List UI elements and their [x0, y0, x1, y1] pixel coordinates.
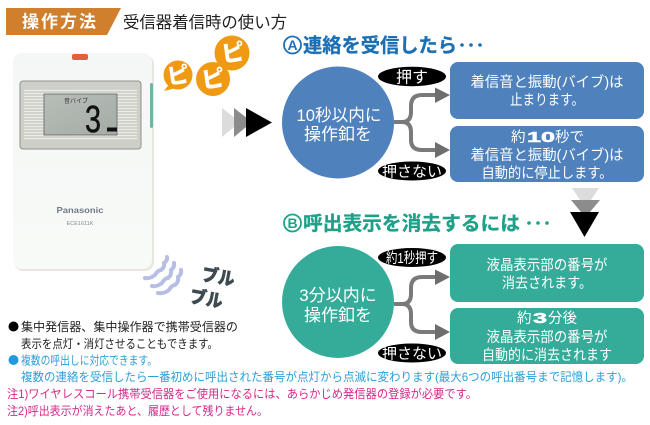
- pill: press 1 sec: [378, 248, 446, 267]
- box B2: 約: [517, 310, 532, 327]
- box A2: [450, 126, 644, 182]
- box A1: 着信音と振動(バイブ)は: [470, 73, 624, 91]
- arrow: down: [570, 188, 600, 237]
- box B2: 液晶表示部の番号が: [486, 329, 608, 346]
- icon: vibration waves: [145, 257, 181, 293]
- icon: pi pi pi: ピ: [165, 62, 191, 89]
- vibration text: [188, 263, 236, 312]
- display stripes: [24, 89, 137, 140]
- vibration text: ブル: [200, 263, 236, 290]
- LCD screen: [44, 94, 117, 135]
- box A2: 10: [527, 129, 555, 146]
- note: multiple calls: 複数の呼出しに対応できます。: [21, 352, 157, 368]
- LCD digit: 3: [85, 99, 101, 141]
- box A1: 止まります。: [510, 92, 584, 109]
- heading A: A: [287, 37, 298, 53]
- pill: no push: 押さない: [382, 164, 442, 180]
- box A2: 自動的に停止します。: [482, 165, 612, 182]
- circle A text: 操作釦を: [304, 125, 372, 144]
- notes: 表示を点灯・消灯させることもできます。: [21, 337, 218, 351]
- circle A text: [296, 106, 382, 144]
- device: pager: [13, 53, 154, 271]
- heading B: 呼出表示を消去するには: [303, 212, 520, 235]
- brand: Panasonic: [56, 205, 104, 215]
- box A2: 約: [511, 129, 526, 146]
- LCD dash: [107, 128, 117, 132]
- branch arrows A: [394, 88, 450, 158]
- box B2: [450, 308, 644, 364]
- panel: B flow: [282, 244, 644, 364]
- panel: A flow: [282, 62, 644, 182]
- heading A: 連絡を受信したら: [303, 34, 457, 57]
- model: ECE1611K: [67, 221, 94, 227]
- arrow: right: [222, 108, 272, 137]
- box B2: 3: [533, 310, 547, 327]
- vibration text: ブル: [188, 285, 224, 312]
- circle B text: 操作釦を: [304, 306, 372, 325]
- header tag: 操作方法: [22, 12, 96, 32]
- circle A: [282, 66, 394, 178]
- notes: 複数の連絡を受信したら一番初めに呼出された番号が点灯から点滅に変わります(最大6つの呼出番号まで記憶します)。: [21, 369, 633, 384]
- header tag: [6, 8, 121, 35]
- circle A text: 10秒以内に: [296, 106, 382, 125]
- branch arrows B: [394, 270, 450, 340]
- box A2: 秒で: [555, 129, 584, 146]
- box B2: 自動的に消去されます: [482, 347, 612, 364]
- icon: pi pi pi: ピ: [200, 65, 226, 93]
- icon: pi pi pi: ピ: [220, 38, 246, 67]
- box B1: [450, 244, 644, 302]
- note: central transmitter: 集中発信器、集中操作器で携帯受信器の: [21, 319, 238, 334]
- red LED: [72, 54, 88, 60]
- box B2: 分後: [548, 310, 577, 327]
- subtitle: 受信器着信時の使い方: [123, 13, 287, 32]
- pill: push: [378, 67, 446, 86]
- icon: pi pi pi: [164, 36, 250, 96]
- heading B: B: [287, 215, 298, 231]
- notes: [7, 319, 633, 418]
- circle B text: 3分以内に: [299, 286, 377, 305]
- box B1: 液晶表示部の番号が: [486, 257, 608, 274]
- pill: press 1 sec: 約1秒押す: [386, 250, 438, 267]
- note 2: 注2)呼出表示が消えたあと、履歴として残りません。: [7, 403, 268, 418]
- box B1: 消去されます。: [502, 275, 592, 292]
- box A1: [450, 62, 644, 119]
- note 1: 注1)ワイヤレスコール携帯受信器をご使用になるには、あらかじめ発信器の登録が必要です。: [7, 386, 477, 401]
- LCD label: 音バイブ: [64, 97, 88, 105]
- pill: no press: 押さない: [382, 346, 442, 362]
- box A2: 着信音と振動(バイブ)は: [470, 146, 624, 164]
- side teal button: [150, 83, 153, 128]
- pill: push: 押す: [396, 68, 428, 86]
- circle B text: [299, 286, 377, 325]
- display frame: [20, 81, 141, 149]
- circle B: [282, 246, 394, 358]
